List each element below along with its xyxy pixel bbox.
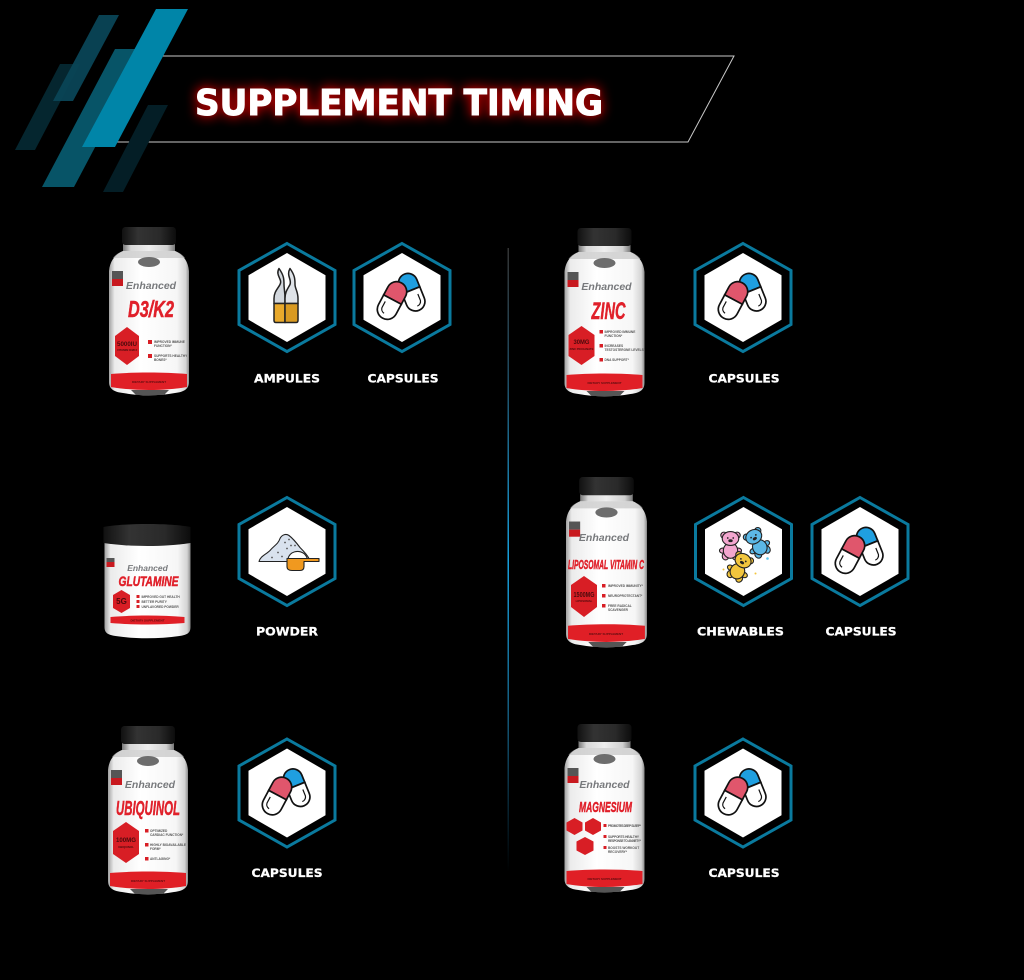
row: Magnesium bottle: SUPPORTS HEALTHY <box>608 835 640 839</box>
row: Zinc bottle: 30MG <box>574 339 590 346</box>
row: Glutamine jar: Enhanced <box>127 563 169 573</box>
row: Magnesium bottle: MAGNESIUM <box>579 799 632 816</box>
row: Magnesium bottle: PROMOTES DEEP SLEEP* <box>608 824 642 828</box>
row: Liposomal Vitamin C bottle: IMPROVED IMMUNITY* <box>608 584 644 588</box>
row: Liposomal Vitamin C bottle: Enhanced <box>579 532 630 544</box>
row: Liposomal Vitamin C bottle: DIETARY SUPPLEMENT <box>589 632 623 636</box>
title: SUPPLEMENT TIMING <box>195 83 603 124</box>
row: D3/K2 bottle: FUNCTION* <box>154 344 172 348</box>
row: D3/K2 bottle: Enhanced <box>126 280 177 292</box>
row: Ubiquinol bottle: UBIQUINOL <box>116 798 180 820</box>
row: Liposomal Vitamin C bottle: 1500MG <box>574 590 595 599</box>
row: D3/K2 bottle: IMPROVED IMMUNE <box>154 340 185 344</box>
row: D3/K2 bottle: BONES* <box>154 358 167 362</box>
row: Zinc bottle: INCREASES <box>604 344 623 348</box>
row: Liposomal Vitamin C bottle <box>566 477 647 647</box>
row: Zinc bottle: FUNCTION* <box>604 334 623 338</box>
row: Glutamine jar: IMPROVED GUT HEALTH <box>142 595 180 599</box>
row: D3/K2 bottle: SUPPORTS HEALTHY <box>154 354 188 358</box>
row: Liposomal Vitamin C bottle: LIPOSOMAL <box>576 599 593 603</box>
vertical divider <box>508 248 509 872</box>
label: capsules: CAPSULES <box>708 866 780 880</box>
row: Ubiquinol bottle: HIGHLY BIOAVAILABLE <box>150 843 186 847</box>
row: Glutamine jar <box>104 524 190 638</box>
row: D3/K2 bottle: 5000IU <box>117 342 137 348</box>
label: capsules: CAPSULES <box>252 866 322 880</box>
row: Zinc bottle: Enhanced <box>581 281 632 293</box>
row: Ubiquinol bottle: 100MG <box>116 837 136 844</box>
label: powder: POWDER <box>256 624 318 638</box>
icon: ampules <box>239 244 335 352</box>
row: Zinc bottle: IMPROVED IMMUNE <box>604 330 635 334</box>
row: Liposomal Vitamin C bottle: SCAVENGER <box>608 608 629 612</box>
icon: powder <box>239 498 335 606</box>
icon: capsules <box>695 739 791 847</box>
label: capsules: CAPSULES <box>826 624 896 638</box>
row: Ubiquinol bottle: OPTIMIZED <box>150 829 168 833</box>
row: Ubiquinol bottle <box>108 726 188 894</box>
row: Zinc bottle: ZINC <box>591 298 626 325</box>
row: Glutamine jar: BETTER PURITY <box>142 600 168 604</box>
row: Ubiquinol bottle: Enhanced <box>125 779 176 791</box>
row: Zinc bottle: DNA SUPPORT* <box>604 358 630 362</box>
label: chewables: CHEWABLES <box>697 624 784 638</box>
row: Zinc bottle: TESTOSTERONE LEVELS* <box>604 348 646 352</box>
row: Magnesium bottle: RECOVERY* <box>608 850 628 854</box>
row: Zinc bottle: ZINC PICOLINATE <box>569 347 594 351</box>
icon: capsules <box>812 498 908 606</box>
row: Ubiquinol bottle: DIETARY SUPPLEMENT <box>131 879 165 883</box>
row: D3/K2 bottle: VITAMIN D3/K2 <box>117 348 137 352</box>
label: ampules: AMPULES <box>254 372 320 386</box>
row: Magnesium bottle: DIETARY SUPPLEMENT <box>587 877 622 881</box>
row: Ubiquinol bottle: CARDIAC FUNCTION* <box>150 833 184 837</box>
row: D3/K2 bottle: DIETARY SUPPLEMENT <box>132 380 166 384</box>
row: Ubiquinol bottle: UBIQUINOL <box>118 845 134 849</box>
label: capsules: CAPSULES <box>708 372 780 386</box>
row: D3/K2 bottle <box>109 227 189 395</box>
row: Magnesium bottle: RESPONSE TO ANXIETY* <box>608 839 642 843</box>
title banner frame <box>116 56 734 142</box>
row: Magnesium bottle <box>564 724 644 892</box>
row: Glutamine jar: UNFLAVORED POWDER <box>142 605 179 609</box>
icon: capsules <box>695 244 791 352</box>
row: Liposomal Vitamin C bottle: NEUROPROTECTANT* <box>608 594 643 598</box>
decorative slanted blue bars <box>15 9 188 192</box>
row: Liposomal Vitamin C bottle: FREE RADICAL <box>608 604 632 608</box>
row: Glutamine jar: GLUTAMINE <box>118 573 179 589</box>
row: Glutamine jar: 5G <box>116 597 127 606</box>
icon: capsules <box>239 739 335 847</box>
row: Zinc bottle: DIETARY SUPPLEMENT <box>587 381 622 385</box>
row: D3/K2 bottle: D3/K2 <box>128 296 174 322</box>
icon: chewables <box>696 498 792 606</box>
row: Zinc bottle <box>564 228 646 396</box>
row: Magnesium bottle: Enhanced <box>579 779 630 791</box>
row: Magnesium bottle: BOOSTS WORKOUT <box>608 846 639 850</box>
row: Glutamine jar: DIETARY SUPPLEMENT <box>130 618 165 622</box>
icon: capsules <box>354 244 450 352</box>
row: Ubiquinol bottle: FORM* <box>150 847 161 851</box>
row: Ubiquinol bottle: ANTI-AGING* <box>150 857 171 861</box>
row: Liposomal Vitamin C bottle: LIPOSOMAL VITAMIN C <box>568 557 644 572</box>
label: capsules: CAPSULES <box>368 372 438 386</box>
